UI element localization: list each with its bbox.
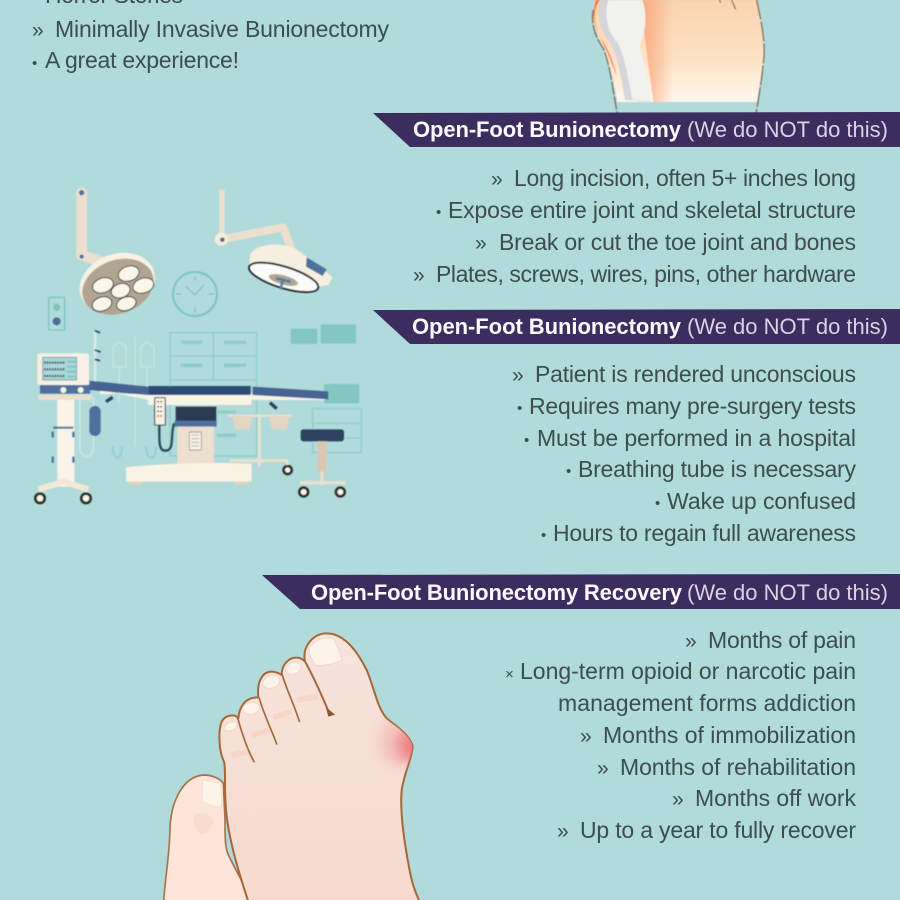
list item: Long incision, often 5+ inches long — [514, 165, 856, 191]
list item: Months of pain — [708, 627, 856, 653]
casters — [35, 466, 345, 503]
wall panel — [49, 297, 65, 330]
list item: • — [541, 527, 546, 544]
list item: Breathing tube is necessary — [578, 456, 856, 482]
list item: Must be performed in a hospital — [537, 425, 856, 451]
list item: » — [413, 264, 425, 287]
banner: Open-Foot Bunionectomy Recovery — [262, 574, 900, 609]
list item: Hours to regain full awareness — [553, 520, 856, 546]
second foot behind — [163, 775, 255, 900]
list item: • — [436, 204, 441, 221]
bullet list item: A great experience: • — [32, 55, 37, 72]
list item: Months of rehabilitation — [620, 754, 856, 780]
list item: Wake up confused — [667, 488, 856, 514]
bunion redness — [378, 718, 421, 765]
list item: • — [566, 463, 571, 480]
list item continuation: management forms addiction — [558, 690, 856, 716]
list item: Months off work — [695, 785, 856, 811]
faded wall cabinets — [170, 333, 361, 456]
table control pendant — [159, 423, 174, 451]
banner: Open-Foot Bunionectomy 1: (We do NOT do this) — [687, 117, 888, 142]
list item: » — [580, 725, 592, 748]
list item: » — [597, 757, 609, 780]
instrument tray stand — [230, 417, 287, 466]
banner: Open-Foot Bunionectomy 2 — [373, 309, 900, 344]
operating table — [100, 390, 325, 400]
list item: Long-term opioid or narcotic pain — [520, 658, 856, 684]
stool — [301, 429, 344, 441]
banner: Open-Foot Bunionectomy 1 — [373, 112, 900, 147]
banner: Open-Foot Bunionectomy 2: (We do NOT do this) — [687, 314, 888, 339]
list: recovery details — [505, 627, 856, 843]
clock — [173, 272, 217, 316]
list: anesthesia details — [512, 361, 856, 546]
anesthesia machine — [63, 400, 68, 487]
list item: » — [491, 168, 503, 191]
list item: Plates, screws, wires, pins, other hardware — [436, 261, 856, 287]
bullet list item: Minimally Invasive Bunionectomy: » — [32, 19, 44, 42]
intro list — [32, 0, 390, 73]
list item: • — [524, 432, 529, 449]
list item: » — [672, 788, 684, 811]
list item: • — [517, 400, 522, 417]
list item: Up to a year to fully recover — [580, 817, 856, 843]
banner: Open-Foot Bunionectomy Recovery: Open-Foot Bunionectomy Recovery — [311, 580, 683, 605]
list item: Break or cut the toe joint and bones — [499, 229, 856, 255]
toenails — [223, 638, 342, 733]
left surgical lamp — [82, 193, 102, 262]
list item: » — [685, 630, 697, 653]
banner: Open-Foot Bunionectomy 1: Open-Foot Bunionectomy — [413, 117, 682, 142]
illustration: bandaged foot — [593, 0, 764, 114]
banner: Open-Foot Bunionectomy 2: Open-Foot Bunionectomy — [412, 314, 682, 339]
list item: Expose entire joint and skeletal structure — [448, 197, 856, 223]
toe creases — [232, 697, 318, 755]
list item: Requires many pre-surgery tests — [529, 393, 856, 419]
illustration: foot with bunion — [163, 633, 422, 900]
list item: » — [475, 232, 487, 255]
banner: Open-Foot Bunionectomy Recovery: (We do NOT do this) — [687, 580, 888, 605]
illustration: operating room — [35, 189, 361, 503]
bullet list item: Minimally Invasive Bunionectomy: Minimally Invasive Bunionectomy — [55, 16, 390, 42]
list item: • — [655, 495, 660, 512]
list item: » — [512, 364, 524, 387]
right surgical lamp — [214, 189, 230, 238]
list: procedure details — [413, 165, 856, 287]
faded IV bags — [113, 337, 156, 458]
toe separators — [237, 663, 330, 762]
list item: × — [505, 666, 514, 683]
main foot — [219, 633, 422, 900]
list item: Patient is rendered unconscious — [535, 361, 856, 387]
list item: » — [557, 820, 569, 843]
bullet list item: A great experience: A great experience! — [45, 47, 239, 73]
list item: Months of immobilization — [603, 722, 856, 748]
